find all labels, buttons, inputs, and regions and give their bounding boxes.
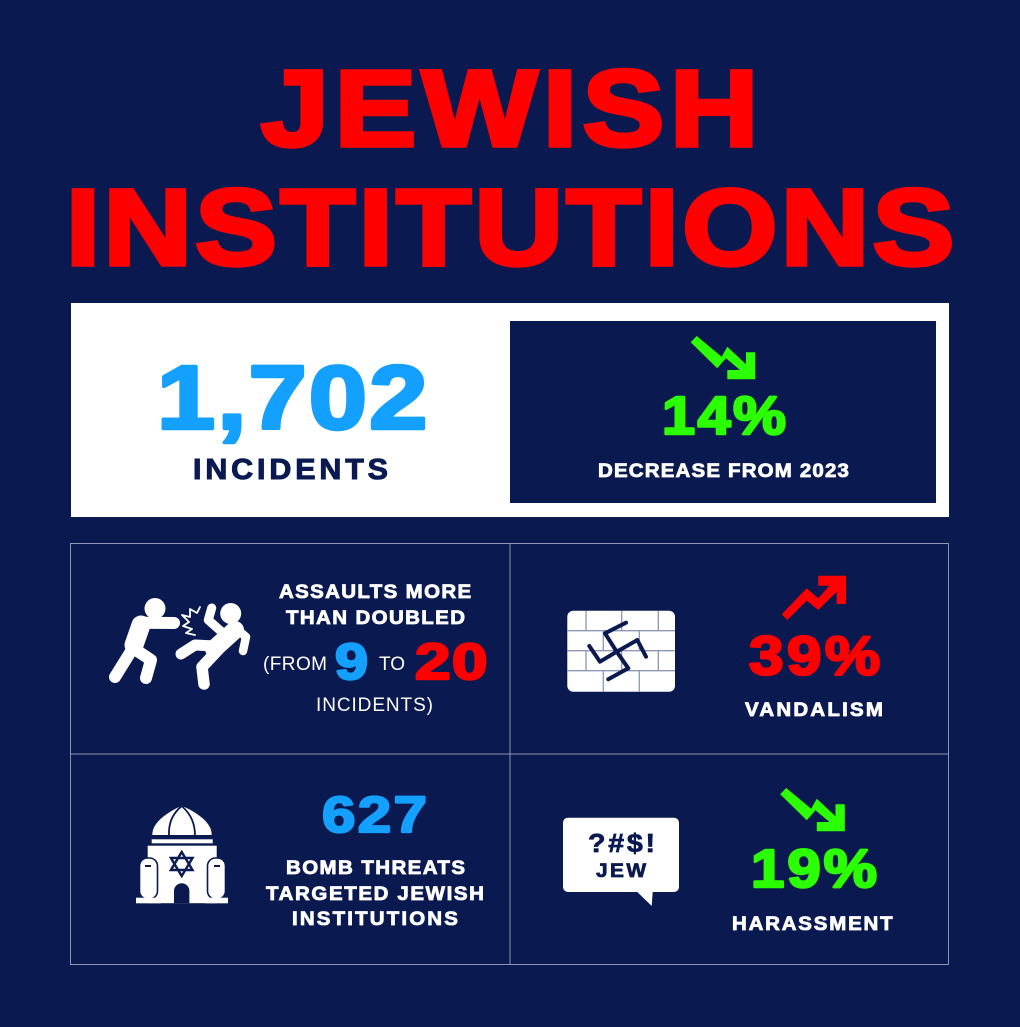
decrease label: DECREASE FROM 2023 [598,460,849,482]
assault heading [279,581,471,629]
from 9 to 20: 20 [415,634,488,690]
icon: synagogue [136,806,228,903]
from 9 to 20 [263,633,488,690]
icon: green down arrow [780,788,845,831]
bomb threats label: INSTITUTIONS [292,908,458,930]
icon: speech bubble: JEW [596,861,646,882]
bomb threats label: TARGETED JEWISH [266,883,484,905]
icon: green down arrow [691,336,755,379]
from 9 to 20: TO [379,654,405,675]
count 627: 627 [322,786,427,843]
panel: decrease [510,321,936,503]
panel: total incidents [71,303,949,517]
icon: assault figures [115,598,246,684]
title [66,49,954,288]
panel: bomb threats [136,786,484,930]
panel: harassment [563,788,893,935]
vandalism label: VANDALISM [745,699,883,721]
panel: assaults [115,581,488,716]
panel: vandalism [567,576,883,721]
percent 14: 14% [662,386,786,446]
percent 39: 39% [749,626,880,687]
incident count: 1,702 [157,347,427,448]
bomb threats label [266,857,484,930]
assault heading: ASSAULTS MORE [279,581,471,603]
percent 19: 19% [751,839,877,899]
title: INSTITUTIONS [66,168,954,288]
title: JEWISH [261,49,758,169]
icon: speech bubble [563,818,679,906]
icon: speech bubble: ?#$! [588,828,655,858]
grid lines [70,543,949,965]
from 9 to 20: (FROM [263,654,327,675]
from 9 to 20: 9 [335,633,368,690]
icon: red up arrow [782,576,846,620]
icon: vandalized brick wall [567,611,675,692]
harassment label: HARASSMENT [732,913,893,935]
bomb threats label: BOMB THREATS [286,857,465,879]
assault heading: THAN DOUBLED [286,607,465,629]
incidents note: INCIDENTS) [316,695,433,716]
incidents label: INCIDENTS [193,454,388,486]
